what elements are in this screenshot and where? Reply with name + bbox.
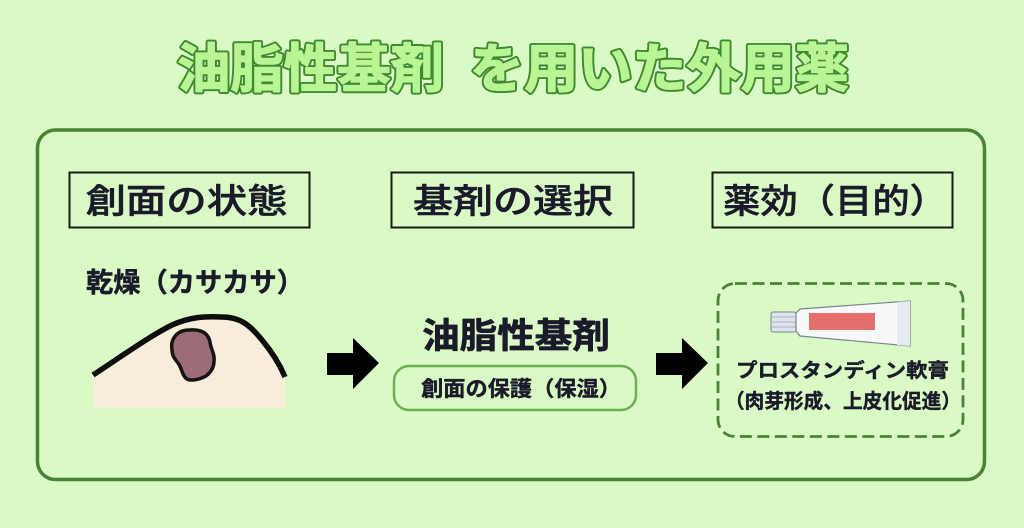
- title: を用いた外用薬: [470, 40, 849, 99]
- heading: drug effect: 薬効（目的）: [723, 183, 947, 221]
- heading: base selection: 基剤の選択: [413, 183, 613, 221]
- heading: wound state: 創面の状態: [86, 183, 288, 221]
- title: 油脂性基剤: [177, 40, 444, 99]
- pill: wound protection: 創面の保護（保湿）: [421, 378, 621, 401]
- title: 油脂性基剤: [177, 40, 444, 99]
- panel: main frame: [38, 130, 984, 480]
- panel: dashed effect box: [718, 284, 963, 436]
- icon: ointment tube: [771, 301, 910, 346]
- heading: wound state: [70, 172, 310, 228]
- title: を用いた外用薬: [470, 40, 849, 99]
- title: [177, 40, 849, 99]
- label: granulation and epithelialization: （肉芽形成、上皮化促進）: [725, 389, 961, 413]
- label: oil-based ointment: 油脂性基剤: [422, 317, 610, 356]
- label: prostaglandin ointment: プロスタンディン軟膏: [736, 359, 949, 382]
- illustration: dry wound on skin: [93, 317, 285, 408]
- heading: drug effect: [712, 172, 952, 228]
- heading: base selection: [392, 172, 634, 228]
- label: dry wound: 乾燥（カサカサ）: [86, 268, 304, 298]
- arrow: base to effect: [656, 338, 708, 389]
- arrow: state to base: [327, 338, 379, 389]
- pill: wound protection: [394, 366, 636, 410]
